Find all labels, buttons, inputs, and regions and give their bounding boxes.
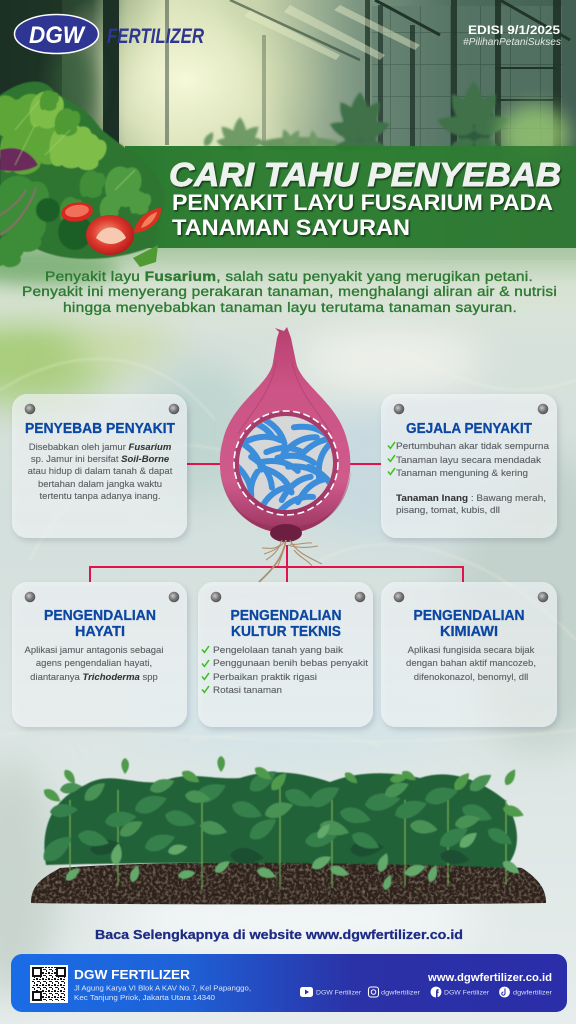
- company info: [74, 967, 251, 1002]
- onion illustration: [220, 327, 351, 582]
- card: pengendalian hayati: diantaranya Trichoderma spp: [30, 672, 158, 683]
- title: CARI TAHU PENYEBAB: [169, 156, 561, 193]
- website call to action: Baca Selengkapnya di website www.dgwfertilizer.co.id: [95, 927, 463, 942]
- title: [169, 156, 561, 240]
- card: pengendalian kultur teknis: Rotasi tanaman: [213, 685, 282, 696]
- fusarium spores micrograph: [239, 416, 333, 510]
- plant foliage mass: [38, 756, 526, 891]
- card: pengendalian kimiawi: KIMIAWI: [440, 624, 498, 640]
- website and social links: dgwfertilizer: [513, 990, 553, 996]
- website and social links: www.dgwfertilizer.co.id: [427, 972, 552, 984]
- card: pengendalian hayati: HAYATI: [75, 624, 125, 640]
- QR code: [30, 965, 68, 1003]
- card: gejala penyakit: Tanaman layu secara mendadak: [396, 455, 541, 466]
- card: pengendalian kultur teknis: Pengelolaan tanah yang baik: [213, 645, 343, 656]
- tomatoes: [60, 200, 161, 267]
- card: pengendalian hayati: Aplikasi jamur antagonis sebagai: [25, 645, 163, 656]
- green title banner: [125, 146, 576, 248]
- company info: DGW FERTILIZER: [74, 967, 191, 982]
- onion crown: [270, 524, 302, 542]
- website and social links: dgwfertilizer: [381, 990, 421, 996]
- card: gejala penyakit: GEJALA PENYAKIT: [406, 421, 532, 437]
- intro paragraph: hingga menyebabkan tanaman layu terutama tanaman sayuran.: [63, 300, 517, 315]
- logo: [14, 14, 205, 54]
- card: pengendalian kimiawi: [381, 582, 557, 727]
- card: pengendalian kimiawi: difenokonazol, benomyl, dll: [414, 672, 528, 683]
- card: pengendalian kultur teknis: KULTUR TEKNIS: [231, 624, 341, 640]
- website and social links: DGW Fertilizer: [444, 990, 490, 996]
- card: gejala penyakit: Tanaman menguning & kering: [396, 468, 528, 479]
- company info: Jl Agung Karya VI Blok A KAV No.7, Kel Papanggo,: [74, 984, 251, 992]
- intro paragraph: Penyakit layu Fusarium , salah satu penyakit yang merugikan petani.: [45, 269, 533, 284]
- connector lines: [90, 464, 463, 582]
- left glow under banner: [0, 250, 120, 286]
- card: penyebab penyakit: bertahan dalam jangka waktu: [38, 479, 162, 490]
- company info: Kec Tanjung Priok, Jakarta Utara 14340: [74, 993, 215, 1002]
- intro paragraph: [22, 269, 557, 315]
- card: penyebab penyakit: Disebabkan oleh jamur Fusarium: [29, 442, 172, 453]
- website and social links: DGW Fertilizer: [316, 990, 362, 996]
- card: pengendalian hayati: [12, 582, 187, 727]
- onion roots: [259, 540, 322, 582]
- title: TANAMAN SAYURAN: [172, 215, 410, 240]
- vegetable pile: [0, 82, 165, 267]
- card: pengendalian kultur teknis: Perbaikan praktik rigasi: [213, 672, 317, 683]
- card: penyebab penyakit: PENYEBAB PENYAKIT: [25, 421, 175, 437]
- card: pengendalian hayati: PENGENDALIAN: [44, 608, 156, 624]
- card: gejala penyakit: Pertumbuhan akar tidak sempurna: [396, 441, 550, 452]
- card: gejala penyakit: Tanaman Inang : Bawang merah,: [396, 493, 546, 504]
- card: penyebab penyakit: atau hidup di dalam tanah & dapat: [28, 466, 173, 477]
- card: pengendalian kultur teknis: [198, 582, 373, 727]
- footer bar: [11, 954, 567, 1012]
- card: gejala penyakit: [381, 394, 557, 538]
- card: pengendalian kimiawi: Aplikasi fungisida secara bijak: [408, 645, 535, 656]
- card: pengendalian kultur teknis: Penggunaan benih bebas penyakit: [213, 658, 368, 669]
- card: pengendalian kultur teknis: PENGENDALIAN: [230, 608, 342, 624]
- card: pengendalian hayati: agens pengendalian hayati,: [36, 658, 152, 669]
- card: pengendalian kimiawi: PENGENDALIAN: [414, 608, 524, 624]
- soil bed and plants: [31, 756, 546, 904]
- greenhouse photo header: [0, 0, 576, 260]
- edition label: EDISI 9/1/2025: [468, 25, 561, 37]
- edition label: #PilihanPetaniSukses: [463, 37, 561, 48]
- logo: DGW: [29, 22, 86, 49]
- greenhouse plants: [202, 82, 510, 146]
- card: penyebab penyakit: tertentu tanpa adanya inang.: [40, 491, 160, 502]
- title: PENYAKIT LAYU FUSARIUM PADA: [172, 190, 553, 215]
- card: penyebab penyakit: sp. Jamur ini bersifat Soil-Borne: [31, 454, 170, 465]
- card: gejala penyakit: pisang, tomat, kubis, dll: [396, 505, 500, 516]
- fade below banner: [0, 248, 576, 340]
- card: pengendalian kimiawi: dengan bahan aktif mancozeb,: [406, 658, 536, 669]
- intro paragraph: Penyakit ini menyerang perakaran tanaman, menghalangi aliran air & nutrisi: [22, 284, 557, 299]
- edition label: [463, 25, 561, 48]
- card: penyebab penyakit: [12, 394, 187, 538]
- soil: [31, 862, 546, 904]
- website and social links: [300, 972, 553, 998]
- logo: FERTILIZER: [107, 25, 205, 48]
